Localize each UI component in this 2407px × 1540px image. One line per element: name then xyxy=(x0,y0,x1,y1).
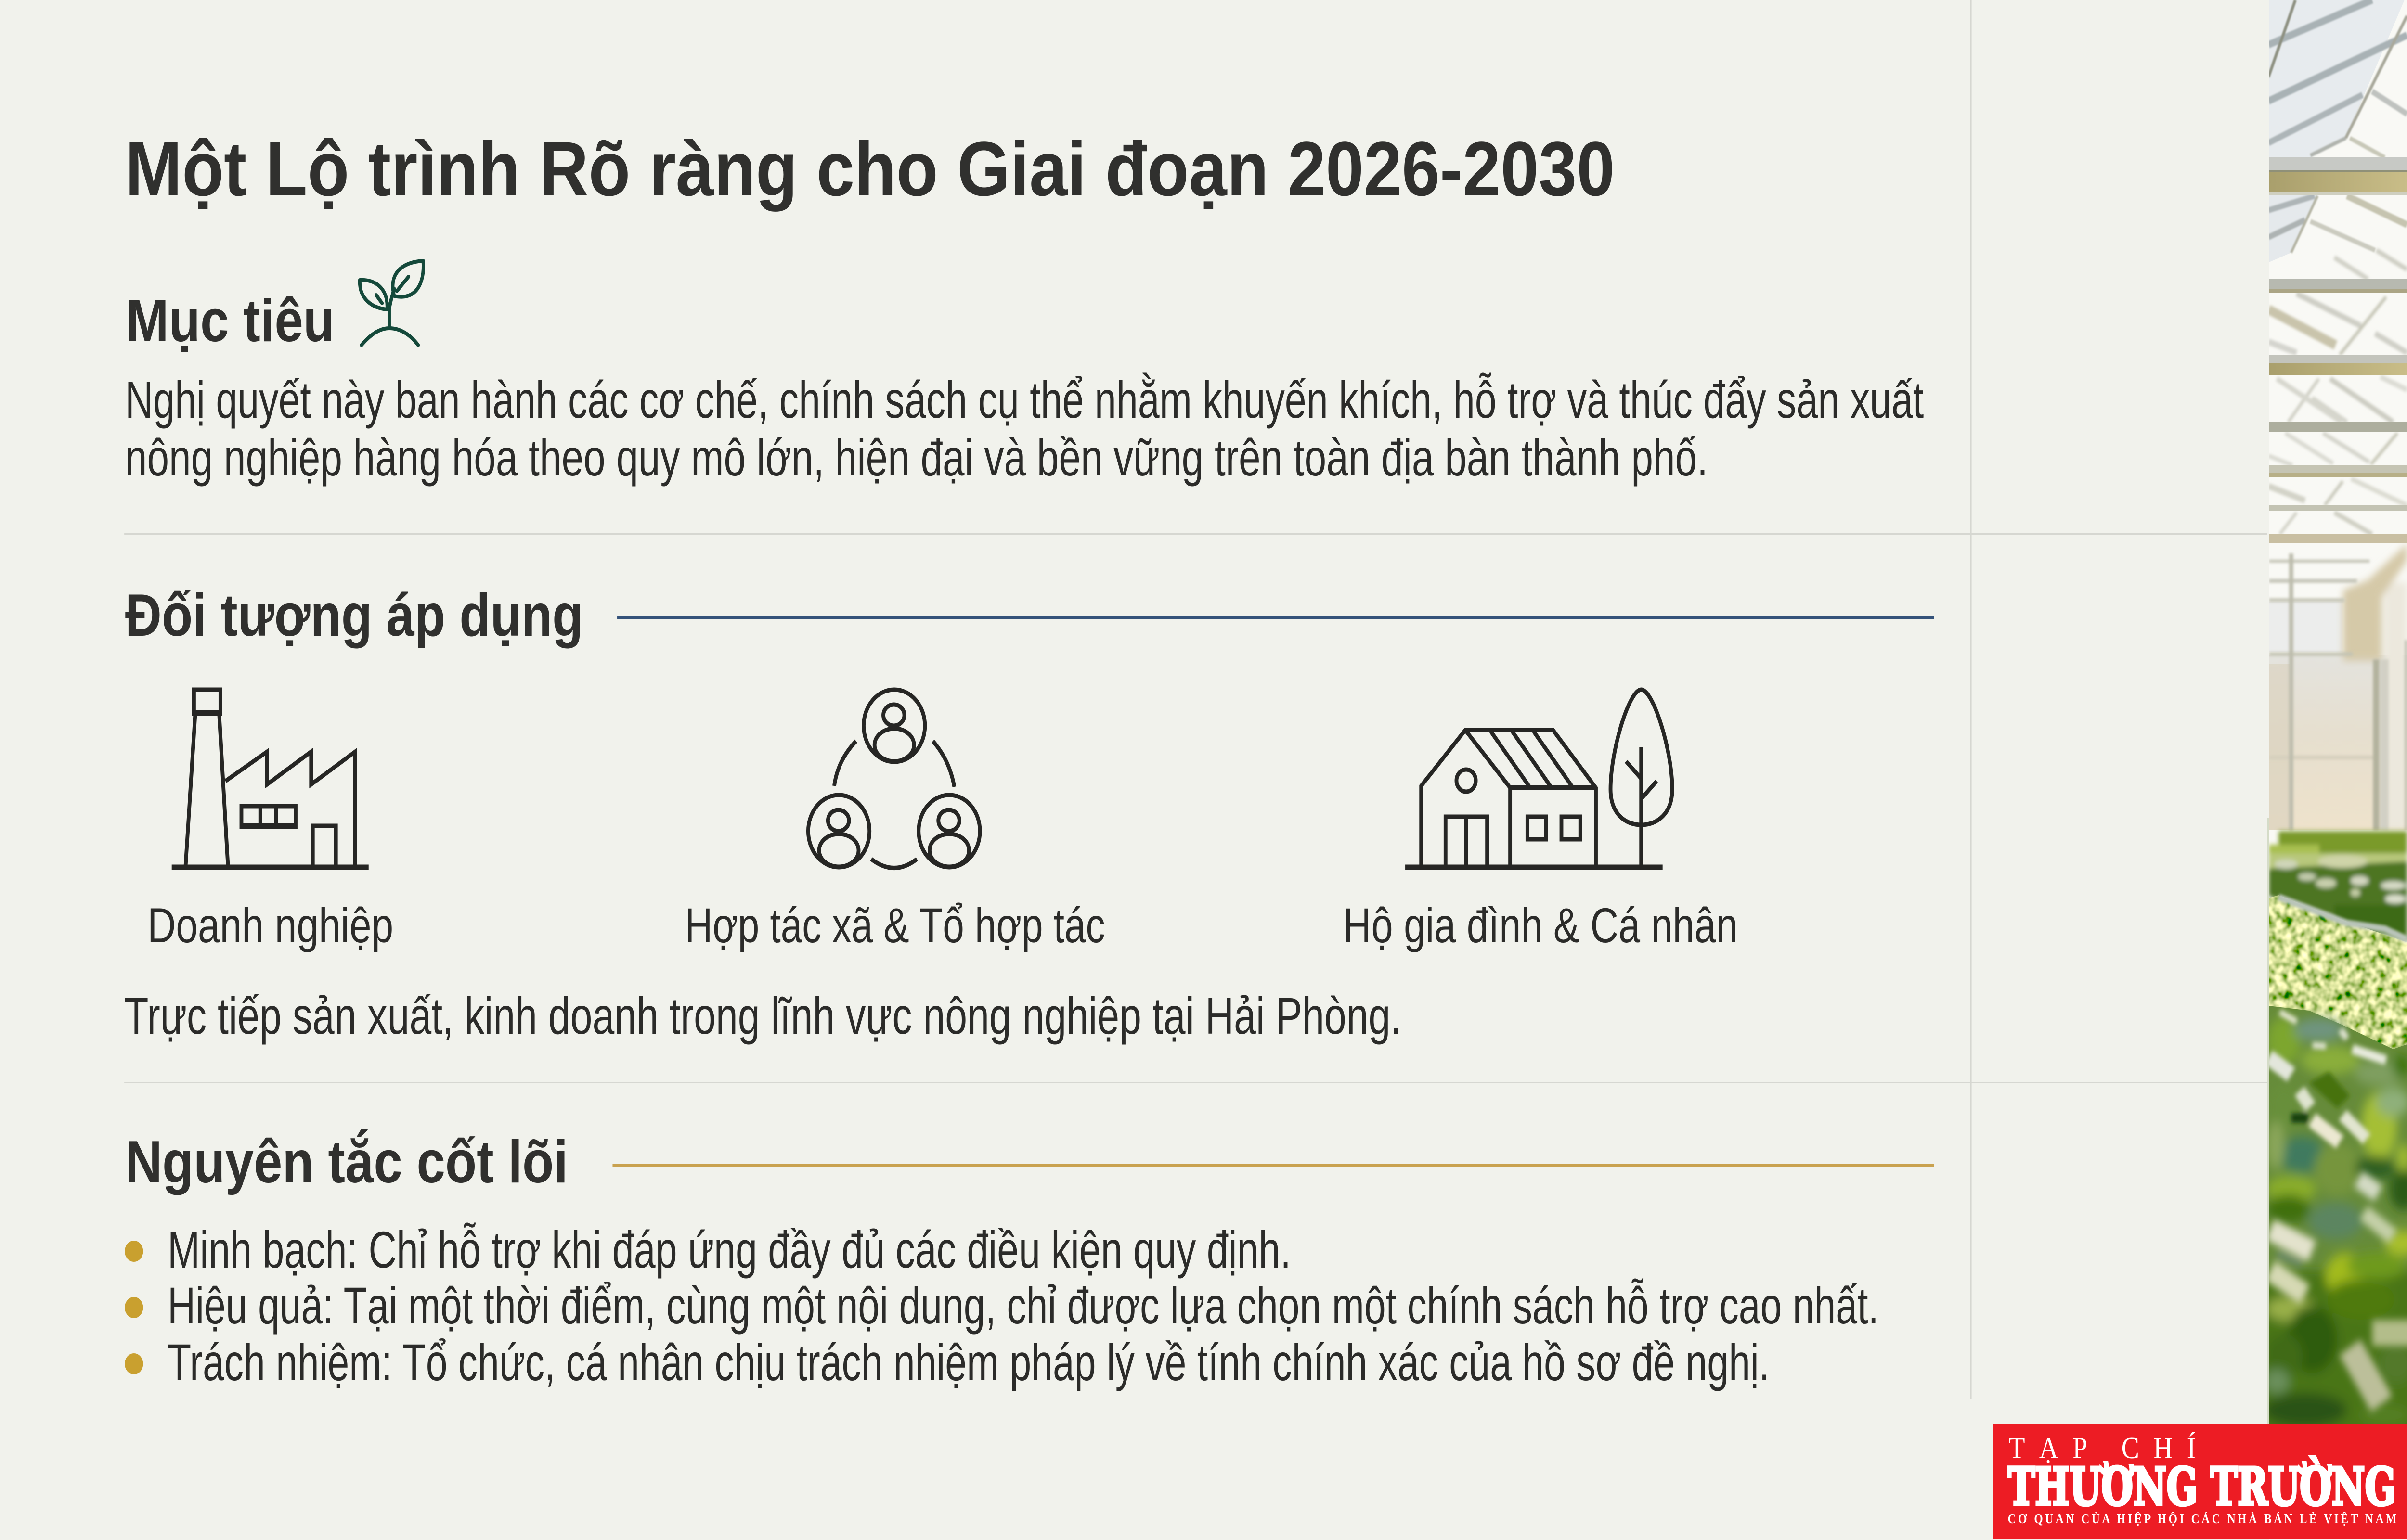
bullet: minh bạch: Minh bạch: Chỉ hỗ trợ khi đáp ứng đầy đủ các điều kiện quy định. xyxy=(168,1221,1291,1279)
icon: cooperative people xyxy=(808,690,980,868)
logo: tạp chí thương trường: CƠ QUAN CỦA HIỆP HỘI CÁC NHÀ BÁN LẺ VIỆT NAM xyxy=(2008,1512,2396,1526)
icon: factory xyxy=(172,690,369,867)
objective text xyxy=(125,371,1924,487)
greenhouse photo xyxy=(2259,0,2407,1540)
heading: mục tiêu: Mục tiêu xyxy=(126,287,335,354)
objective text: nông nghiệp hàng hóa theo quy mô lớn, hiện đại và bền vững trên toàn địa bàn thành phố. xyxy=(125,429,1708,487)
gold heading rule xyxy=(612,1164,1934,1167)
icon: household house and tree xyxy=(1405,690,1672,867)
logo: tạp chí thương trường: TẠP CHÍ xyxy=(2008,1430,2196,1465)
blue heading rule xyxy=(617,616,1934,619)
title: Một Lộ trình Rõ ràng cho Giai đoạn 2026-2030 xyxy=(125,126,1615,212)
vertical divider xyxy=(1970,0,1972,1399)
objective text: Nghị quyết này ban hành các cơ chế, chính sách cụ thể nhằm khuyến khích, hỗ trợ và thúc đẩy sản xuất xyxy=(125,371,1924,429)
panel: nguyên tắc cốt lõi xyxy=(125,1129,1934,1391)
label: doanh nghiệp: Doanh nghiệp xyxy=(147,898,393,953)
logo: tạp chí thương trường xyxy=(1993,1424,2407,1539)
icon: sprout xyxy=(360,261,424,345)
heading: đối tượng áp dụng: Đối tượng áp dụng xyxy=(125,582,583,649)
label: hộ gia đình & cá nhân: Hộ gia đình & Cá nhân xyxy=(1343,898,1738,953)
bullet: hiệu quả: Hiệu quả: Tại một thời điểm, cùng một nội dung, chỉ được lựa chọn một chính sách hỗ trợ cao nhất. xyxy=(168,1277,1879,1335)
panel: mục tiêu xyxy=(125,261,1924,487)
horizontal divider top xyxy=(124,533,2267,535)
label: hợp tác xã & tổ hợp tác: Hợp tác xã & Tổ hợp tác xyxy=(685,898,1105,953)
bullet list xyxy=(125,1221,1879,1391)
bullet: trách nhiệm: Trách nhiệm: Tổ chức, cá nhân chịu trách nhiệm pháp lý về tính chính xác của hồ sơ đề nghị. xyxy=(168,1334,1770,1391)
scope text: Trực tiếp sản xuất, kinh doanh trong lĩnh vực nông nghiệp tại Hải Phòng. xyxy=(124,987,1401,1045)
horizontal divider bottom xyxy=(124,1082,2267,1083)
heading: nguyên tắc cốt lõi: Nguyên tắc cốt lõi xyxy=(125,1129,568,1195)
panel: đối tượng áp dụng xyxy=(124,582,1934,1045)
photo edge highlight xyxy=(2267,818,2269,1424)
